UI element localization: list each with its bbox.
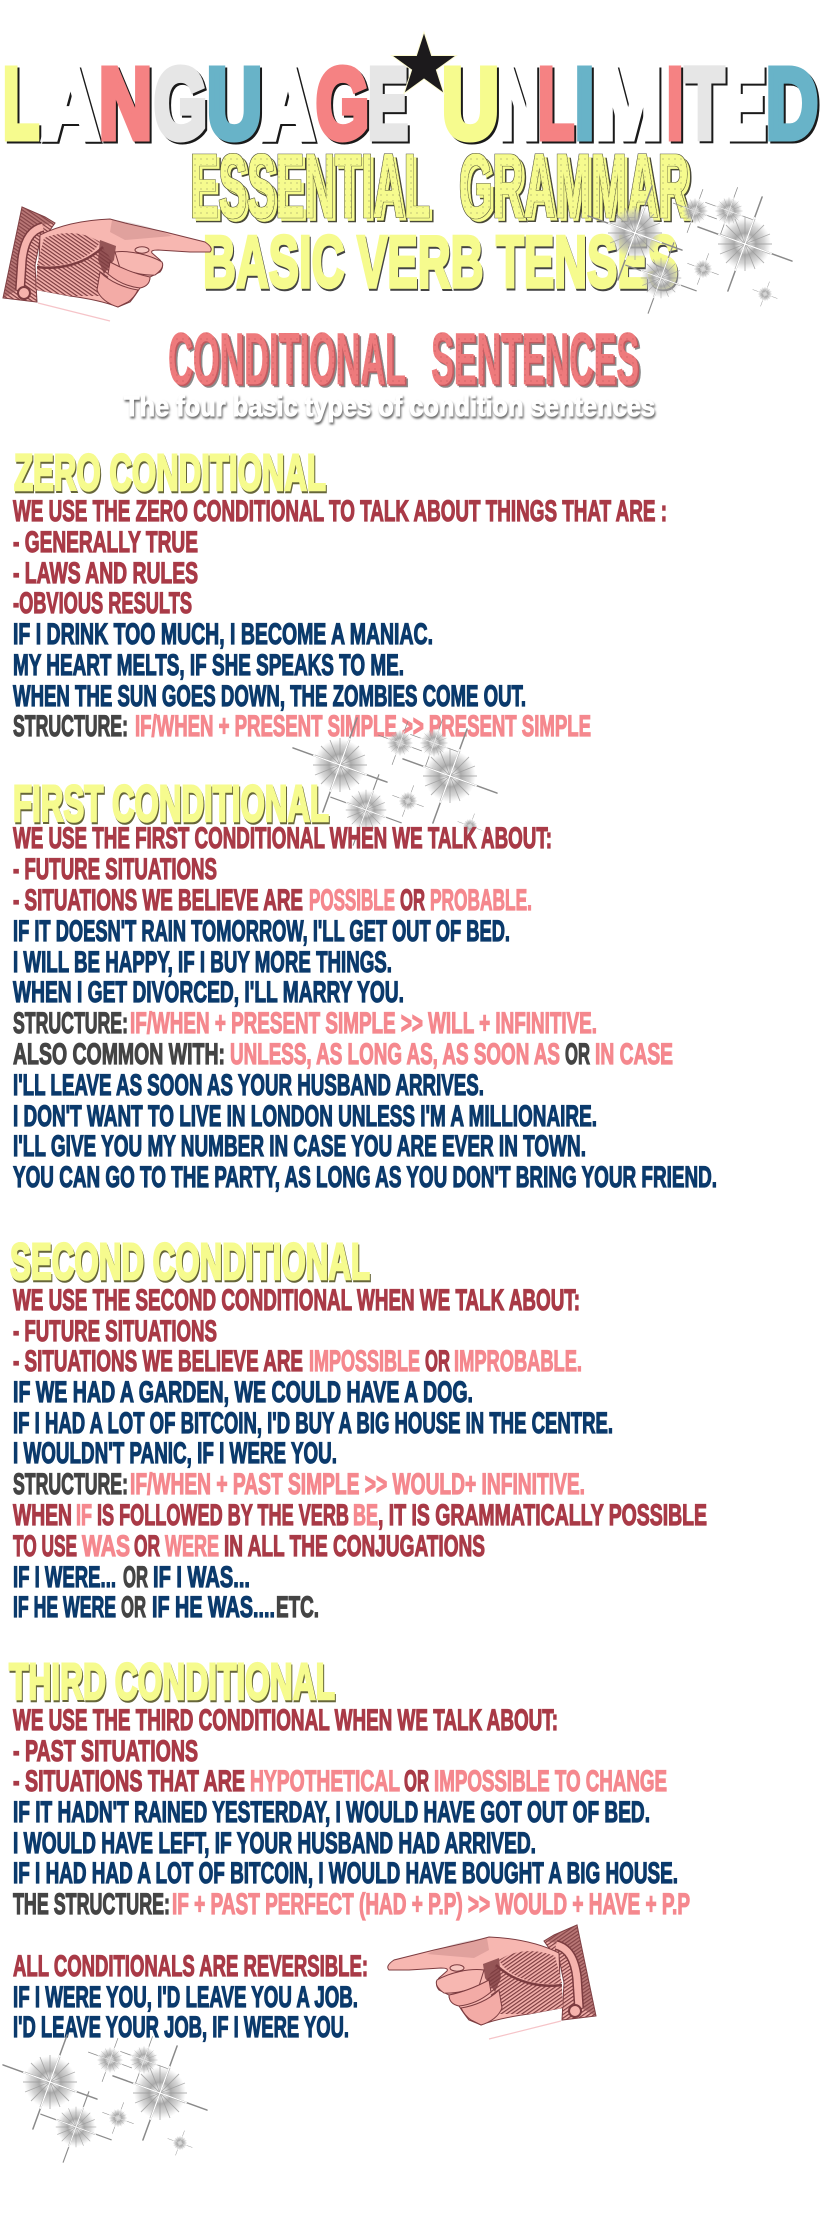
heading: First Conditional: FIRST CONDITIONAL (13, 775, 329, 832)
title: Language Unlimited: L (538, 48, 574, 160)
panel: reversible note: IF I WERE YOU, I'D LEAVE YOU A JOB. (13, 1981, 358, 2014)
sparkles: middle (276, 701, 514, 858)
icon: pointing hand, top (3, 207, 211, 321)
panel: second conditional text: WHEN (13, 1499, 72, 1532)
panel: zero conditional text: -OBVIOUS RESULTS (13, 587, 192, 620)
sparkles: bottom left (0, 2018, 224, 2175)
panel: second conditional text: OR (134, 1530, 160, 1563)
panel: second conditional text (13, 1284, 707, 1624)
panel: first conditional text: IN CASE (595, 1038, 673, 1071)
panel: reversible note: ALL CONDITIONALS ARE REVERSIBLE: (13, 1950, 368, 1983)
panel: second conditional text: OR (121, 1591, 146, 1624)
panel: first conditional text: UNLESS, AS LONG AS, AS SOON AS (230, 1038, 560, 1071)
title: Language Unlimited: N (499, 48, 539, 160)
panel: second conditional text: OR (425, 1345, 450, 1378)
panel: first conditional text: POSSIBLE (309, 884, 395, 917)
panel: first conditional text: I WILL BE HAPPY, IF I BUY MORE THINGS. (13, 946, 392, 979)
panel: second conditional text: IF HE WERE (13, 1591, 116, 1624)
title: Language Unlimited: A (42, 48, 99, 160)
icon: pointing hand, bottom (388, 1925, 596, 2039)
panel: second conditional text: WERE (165, 1530, 219, 1563)
title: Language Unlimited: G (154, 48, 207, 160)
panel: second conditional text: ETC. (276, 1591, 319, 1624)
panel: second conditional text: BE (353, 1499, 378, 1532)
panel: zero conditional text: - GENERALLY TRUE (13, 526, 198, 559)
panel: first conditional text: I'LL LEAVE AS SOON AS YOUR HUSBAND ARRIVES. (13, 1069, 484, 1102)
heading: Second Conditional: SECOND CONDITIONAL (10, 1233, 370, 1290)
panel: second conditional text: OR (123, 1561, 148, 1594)
title: Language Unlimited: N (99, 48, 152, 160)
panel: third conditional text: - PAST SITUATIONS (13, 1735, 198, 1768)
heading: Third Conditional: THIRD CONDITIONAL (9, 1653, 335, 1710)
panel: second conditional text: WAS (82, 1530, 130, 1563)
panel: third conditional text: I WOULD HAVE LEFT, IF YOUR HUSBAND HAD ARRIVED. (13, 1827, 536, 1860)
panel: first conditional text: STRUCTURE: (13, 1007, 128, 1040)
panel: first conditional text: - FUTURE SITUATIONS (13, 853, 217, 886)
panel: second conditional text: IF (76, 1499, 92, 1532)
panel: second conditional text: STRUCTURE: (13, 1468, 128, 1501)
panel: zero conditional text (13, 495, 667, 743)
title: Language Unlimited: G (316, 48, 369, 160)
panel: third conditional text: HYPOTHETICAL (250, 1765, 400, 1798)
panel: second conditional text: IF I WERE... (13, 1561, 116, 1594)
panel: first conditional text: PROBABLE. (430, 884, 532, 917)
panel: second conditional text: - SITUATIONS WE BELIEVE ARE (13, 1345, 303, 1378)
panel: zero conditional text: MY HEART MELTS, IF SHE SPEAKS TO ME. (13, 649, 404, 682)
subtitle: The four basic types of condition sentences (124, 391, 655, 423)
title: Language Unlimited: M (594, 48, 662, 160)
panel: first conditional text: - SITUATIONS WE BELIEVE ARE (13, 884, 303, 917)
panel: second conditional text: I WOULDN'T PANIC, IF I WERE YOU. (13, 1437, 337, 1470)
icon: black star (392, 32, 456, 94)
panel: second conditional text: IF/WHEN + PAST SIMPLE >> WOULD+ INFINITIVE. (130, 1468, 585, 1501)
title: Language Unlimited: E (368, 48, 408, 160)
sparkles: top right (571, 169, 809, 326)
title: Language Unlimited: A (262, 48, 314, 160)
panel: second conditional text: IMPROBABLE. (454, 1345, 582, 1378)
title: Language Unlimited: I (667, 48, 683, 160)
title: Language Unlimited: T (685, 48, 724, 160)
panel: second conditional text: IF HE WAS.... (152, 1591, 275, 1624)
panel: first conditional text: OR (400, 884, 425, 917)
panel: second conditional text: IF I WAS... (153, 1561, 250, 1594)
title: Language Unlimited: L (3, 48, 39, 160)
heading: Conditional Sentences: CONDITIONAL (168, 319, 406, 400)
panel: third conditional text: - SITUATIONS THAT ARE (13, 1765, 245, 1798)
title: Language Unlimited: U (207, 48, 262, 160)
panel: third conditional text: THE STRUCTURE: (13, 1888, 170, 1921)
panel: zero conditional text: WHEN THE SUN GOES DOWN, THE ZOMBIES COME OUT. (13, 680, 526, 713)
panel: third conditional text: IMPOSSIBLE TO CHANGE (434, 1765, 667, 1798)
panel: reversible note: I'D LEAVE YOUR JOB, IF I WERE YOU. (13, 2011, 349, 2044)
panel: third conditional text: OR (404, 1765, 429, 1798)
panel: first conditional text (13, 822, 717, 1194)
panel: second conditional text: IS FOLLOWED BY THE VERB (97, 1499, 349, 1532)
panel: second conditional text: IN ALL THE CONJUGATIONS (224, 1530, 485, 1563)
title: Language Unlimited: U (442, 48, 499, 160)
panel: first conditional text: ALSO COMMON WITH: (13, 1038, 225, 1071)
panel: zero conditional text: IF I DRINK TOO MUCH, I BECOME A MANIAC. (13, 618, 433, 651)
panel: first conditional text: WHEN I GET DIVORCED, I'LL MARRY YOU. (13, 976, 404, 1009)
panel: first conditional text: OR (565, 1038, 590, 1071)
panel: second conditional text: TO USE (13, 1530, 77, 1563)
heading: Essential Grammar: ESSENTIAL (190, 137, 430, 237)
panel: zero conditional text: STRUCTURE: (13, 710, 128, 743)
panel: second conditional text: - FUTURE SITUATIONS (13, 1315, 217, 1348)
panel: first conditional text: IF IT DOESN'T RAIN TOMORROW, I'LL GET OUT OF BED. (13, 915, 510, 948)
title: Language Unlimited: E (726, 48, 766, 160)
panel: second conditional text: IMPOSSIBLE (309, 1345, 420, 1378)
panel: second conditional text: IF WE HAD A GARDEN, WE COULD HAVE A DOG. (13, 1376, 473, 1409)
panel: zero conditional text: - LAWS AND RULES (13, 557, 198, 590)
title: Language Unlimited: I (575, 48, 594, 160)
heading: Zero Conditional: ZERO CONDITIONAL (14, 444, 326, 501)
panel: third conditional text (13, 1704, 690, 1921)
title: Language Unlimited (3, 48, 818, 160)
panel: reversible note (13, 1950, 368, 2044)
